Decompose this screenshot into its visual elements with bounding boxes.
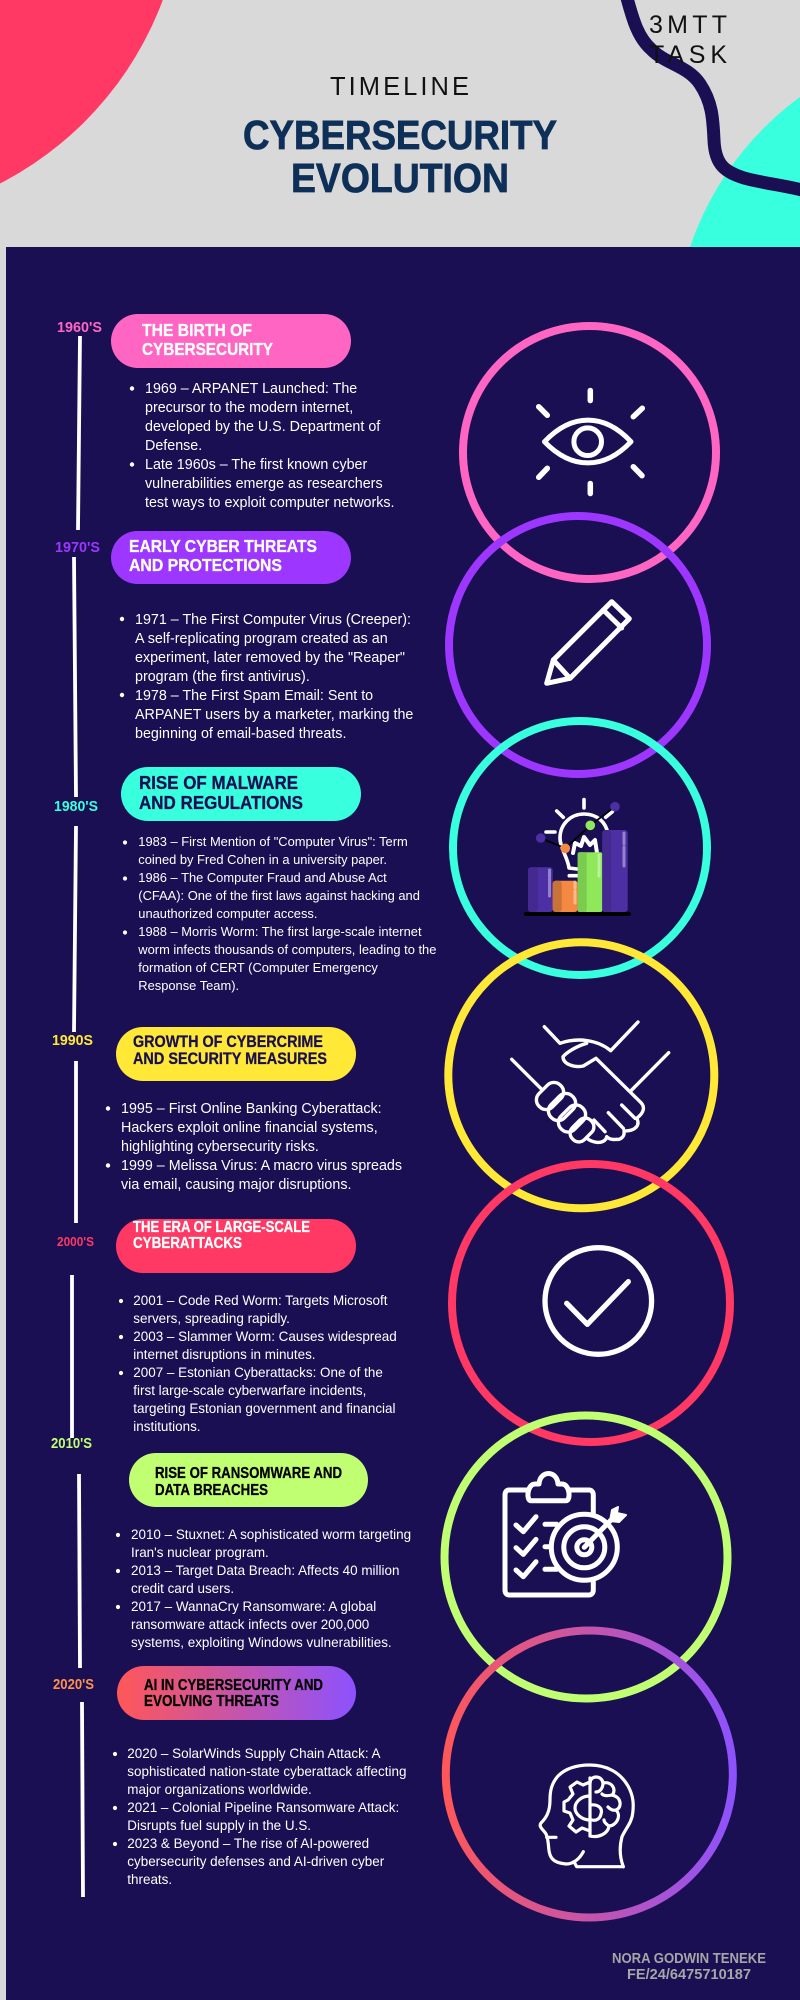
red corner circle xyxy=(0,0,163,184)
2000s text block: first large-scale cyberwarfare incidents, xyxy=(133,1383,366,1398)
2010s text block: 2017 – WannaCry Ransomware: A global xyxy=(131,1599,376,1614)
1980s text block: 1986 – The Computer Fraud and Abuse Act xyxy=(138,870,387,885)
1960s text block: Late 1960s – The first known cyber xyxy=(145,457,367,473)
1980s text block xyxy=(123,834,436,993)
circle: 2020s gradient xyxy=(446,1630,733,1918)
2000s timeline line xyxy=(70,1275,74,1438)
2010s decade label: 2010'S xyxy=(51,1436,92,1452)
bulb outline xyxy=(546,800,612,876)
1980s text block: 1988 – Morris Worm: The first large-scale internet xyxy=(138,924,422,939)
1990s decade label: 1990S xyxy=(52,1033,93,1049)
1980s heading pill: RISE OF MALWARE xyxy=(139,772,298,793)
2000s text block: targeting Estonian government and financial xyxy=(133,1401,396,1416)
icon: check in circle xyxy=(545,1248,652,1354)
icon: pencil xyxy=(547,602,629,683)
2000s text block xyxy=(119,1293,397,1434)
1990s text block: Hackers exploit online financial systems, xyxy=(121,1120,378,1136)
2000s text block: internet disruptions in minutes. xyxy=(133,1347,316,1362)
2010s heading pill xyxy=(129,1453,368,1507)
2000s decade label: 2000'S xyxy=(57,1235,94,1249)
2010s heading pill: RISE OF RANSOMWARE AND xyxy=(155,1465,342,1482)
1980s text block: (CFAA): One of the first laws against hacking and xyxy=(138,888,420,903)
footer: author credit xyxy=(612,1951,766,1983)
1970s heading pill: EARLY CYBER THREATS xyxy=(129,536,317,556)
2020s heading pill xyxy=(117,1666,356,1720)
1990s heading pill xyxy=(116,1027,356,1081)
2000s text block: 2007 – Estonian Cyberattacks: One of the xyxy=(133,1365,383,1380)
1990s text block: via email, causing major disruptions. xyxy=(121,1177,351,1193)
2020s text block: 2023 & Beyond – The rise of AI-powered xyxy=(127,1836,369,1851)
1960s decade label: 1960'S xyxy=(57,320,102,336)
bars xyxy=(528,867,553,912)
2010s text block: ransomware attack infects over 200,000 xyxy=(131,1617,369,1632)
1970s text block: A self-replicating program created as an xyxy=(135,631,388,647)
2010s text block: 2010 – Stuxnet: A sophisticated worm targeting xyxy=(131,1527,411,1542)
dark squiggle xyxy=(627,0,800,190)
1980s heading pill xyxy=(121,767,361,821)
icon: handshake xyxy=(512,1022,669,1145)
base line xyxy=(526,912,629,916)
footer: author credit: NORA GODWIN TENEKE xyxy=(612,1951,766,1967)
2000s text block: servers, spreading rapidly. xyxy=(133,1311,290,1326)
1980s text block: Response Team). xyxy=(138,978,239,993)
1970s decade label: 1970'S xyxy=(55,540,100,556)
trend line xyxy=(541,807,615,848)
1960s timeline line xyxy=(78,336,80,530)
2010s timeline line xyxy=(79,1474,80,1668)
2020s text block: 2020 – SolarWinds Supply Chain Attack: A xyxy=(127,1746,381,1761)
1980s decade label: 1980'S xyxy=(54,798,98,815)
2020s text block: 2021 – Colonial Pipeline Ransomware Attack: xyxy=(127,1800,399,1815)
2020s text block: cybersecurity defenses and AI-driven cyber xyxy=(127,1854,385,1869)
2000s text block: 2003 – Slammer Worm: Causes widespread xyxy=(133,1329,397,1344)
1990s text block: 1995 – First Online Banking Cyberattack: xyxy=(121,1101,382,1117)
2000s heading pill: THE ERA OF LARGE-SCALE xyxy=(133,1219,310,1236)
2010s text block: Iran's nuclear program. xyxy=(131,1545,269,1560)
1980s text block: coined by Fred Cohen in a university paper. xyxy=(138,852,387,867)
circle: 1990s yellow xyxy=(448,942,714,1208)
1980s timeline line xyxy=(74,826,76,1032)
2020s text block: sophisticated nation-state cyberattack affecting xyxy=(127,1764,406,1779)
1960s text block: developed by the U.S. Department of xyxy=(145,419,380,435)
1970s heading pill xyxy=(111,531,351,584)
1970s text block: 1971 – The First Computer Virus (Creeper): xyxy=(135,612,411,628)
1960s text block: test ways to exploit computer networks. xyxy=(145,495,395,511)
1960s heading pill: THE BIRTH OF xyxy=(142,320,252,340)
2000s text block: 2001 – Code Red Worm: Targets Microsoft xyxy=(133,1293,388,1308)
title: CYBERSECURITY xyxy=(243,112,557,158)
1960s text block xyxy=(130,381,395,511)
1980s text block: formation of CERT (Computer Emergency xyxy=(138,960,378,975)
1960s text block: vulnerabilities emerge as researchers xyxy=(145,476,383,492)
1960s heading pill xyxy=(111,314,351,368)
2020s timeline line xyxy=(82,1702,83,1897)
icon: clipboard with target xyxy=(505,1474,626,1595)
1970s text block: beginning of email-based threats. xyxy=(135,726,346,742)
icon: head with gear and brain xyxy=(540,1765,633,1867)
1990s text block xyxy=(106,1101,402,1193)
1980s text block: worm infects thousands of computers, leading to the xyxy=(137,942,436,957)
1960s text block: 1969 – ARPANET Launched: The xyxy=(145,381,357,397)
2000s text block: institutions. xyxy=(133,1419,201,1434)
2010s heading pill: DATA BREACHES xyxy=(155,1482,268,1499)
2020s text block: Disrupts fuel supply in the U.S. xyxy=(127,1818,311,1833)
icon: eye xyxy=(539,390,642,494)
1970s text block: program (the first antivirus). xyxy=(135,669,310,685)
1980s heading pill: AND REGULATIONS xyxy=(139,792,303,813)
teal corner circle xyxy=(690,97,800,247)
label: 3MTT task: 3MTT xyxy=(649,11,727,39)
1970s timeline line xyxy=(74,557,76,797)
footer: author credit: FE/24/6475710187 xyxy=(627,1967,751,1983)
circle: 1960s pink xyxy=(463,326,716,579)
title: EVOLUTION xyxy=(291,155,509,201)
1990s heading pill: GROWTH OF CYBERCRIME xyxy=(133,1033,323,1051)
circle: 2010s lime xyxy=(444,1416,728,1698)
2020s decade label: 2020'S xyxy=(53,1677,94,1693)
2010s text block: credit card users. xyxy=(131,1581,234,1596)
2020s text block xyxy=(113,1746,406,1887)
2020s heading pill: AI IN CYBERSECURITY AND xyxy=(144,1677,323,1694)
2000s heading pill xyxy=(116,1219,356,1273)
title xyxy=(243,112,557,201)
1970s text block: ARPANET users by a marketer, marking the xyxy=(135,707,413,723)
2000s heading pill: CYBERATTACKS xyxy=(133,1235,242,1252)
eyebrow: timeline: TIMELINE xyxy=(330,73,469,101)
2020s heading pill: EVOLVING THREATS xyxy=(144,1693,279,1710)
icon: bar chart with light bulb xyxy=(526,800,629,914)
circle: 1980s teal xyxy=(453,721,707,975)
label: 3MTT task: TASK xyxy=(649,41,727,69)
1960s text block: precursor to the modern internet, xyxy=(145,400,353,416)
1990s text block: highlighting cybersecurity risks. xyxy=(121,1139,319,1155)
circle: 2000s red xyxy=(452,1164,730,1442)
1970s text block xyxy=(120,612,413,742)
1980s text block: 1983 – First Mention of "Computer Virus": Term xyxy=(138,834,408,849)
1960s text block: Defense. xyxy=(145,438,202,454)
label: 3MTT task xyxy=(649,11,727,69)
1990s text block: 1999 – Melissa Virus: A macro virus spreads xyxy=(121,1158,402,1174)
2020s text block: major organizations worldwide. xyxy=(127,1782,312,1797)
1990s timeline line xyxy=(74,1061,78,1223)
2010s text block xyxy=(116,1527,411,1650)
1970s heading pill: AND PROTECTIONS xyxy=(129,555,282,575)
1990s heading pill: AND SECURITY MEASURES xyxy=(133,1050,327,1068)
1970s text block: 1978 – The First Spam Email: Sent to xyxy=(135,688,373,704)
1980s text block: unauthorized computer access. xyxy=(138,906,317,921)
circle: 1970s purple xyxy=(449,516,707,774)
1960s heading pill: CYBERSECURITY xyxy=(142,339,273,359)
2010s text block: 2013 – Target Data Breach: Affects 40 million xyxy=(131,1563,399,1578)
1970s text block: experiment, later removed by the "Reaper" xyxy=(135,650,405,666)
2020s text block: threats. xyxy=(127,1872,172,1887)
2010s text block: systems, exploiting Windows vulnerabilities. xyxy=(131,1635,392,1650)
